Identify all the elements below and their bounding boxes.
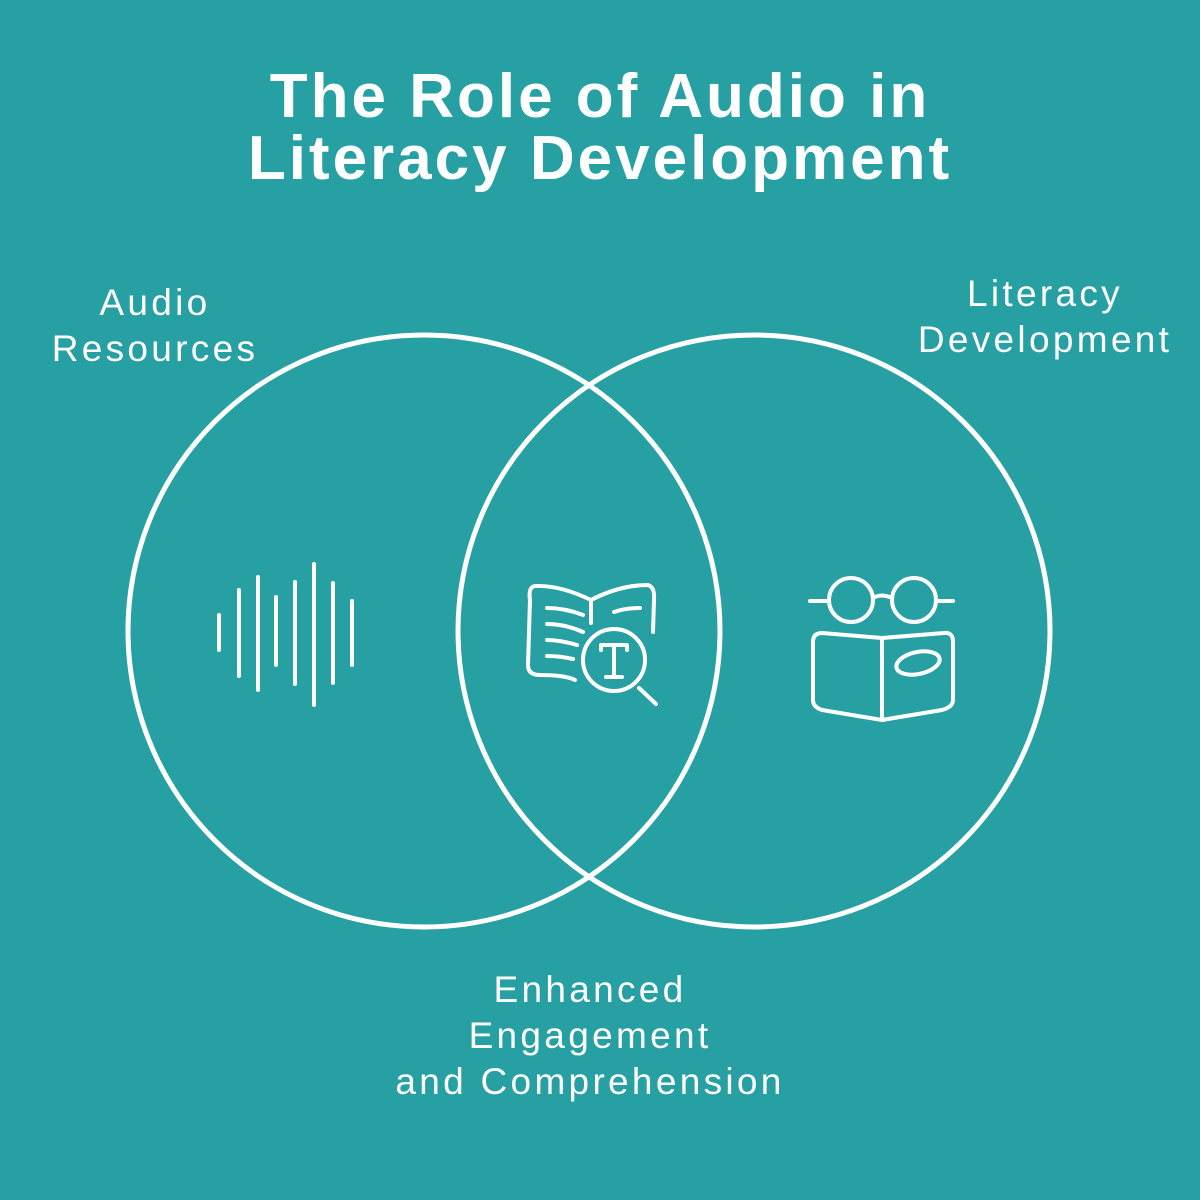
label: literacy development: Literacy: [967, 273, 1123, 314]
label: literacy development: [918, 273, 1172, 360]
label: audio resources: [52, 282, 258, 369]
circle: literacy: [458, 335, 1050, 927]
title: [248, 62, 952, 193]
label: audio resources: Audio: [99, 282, 211, 323]
icon: sound wave: [219, 564, 352, 705]
icon: reader with glasses: [810, 578, 953, 720]
label: intersection: [395, 969, 785, 1102]
label: intersection: Enhanced: [493, 969, 687, 1010]
title: The Role of Audio in: [270, 62, 930, 131]
label: literacy development: Development: [918, 319, 1172, 360]
icon: book with magnifier: [528, 585, 656, 704]
label: intersection: and Comprehension: [395, 1061, 785, 1102]
label: intersection: Engagement: [469, 1015, 711, 1056]
label: audio resources: Resources: [52, 328, 258, 369]
title: Literacy Development: [248, 124, 952, 193]
circle: audio: [128, 335, 720, 927]
